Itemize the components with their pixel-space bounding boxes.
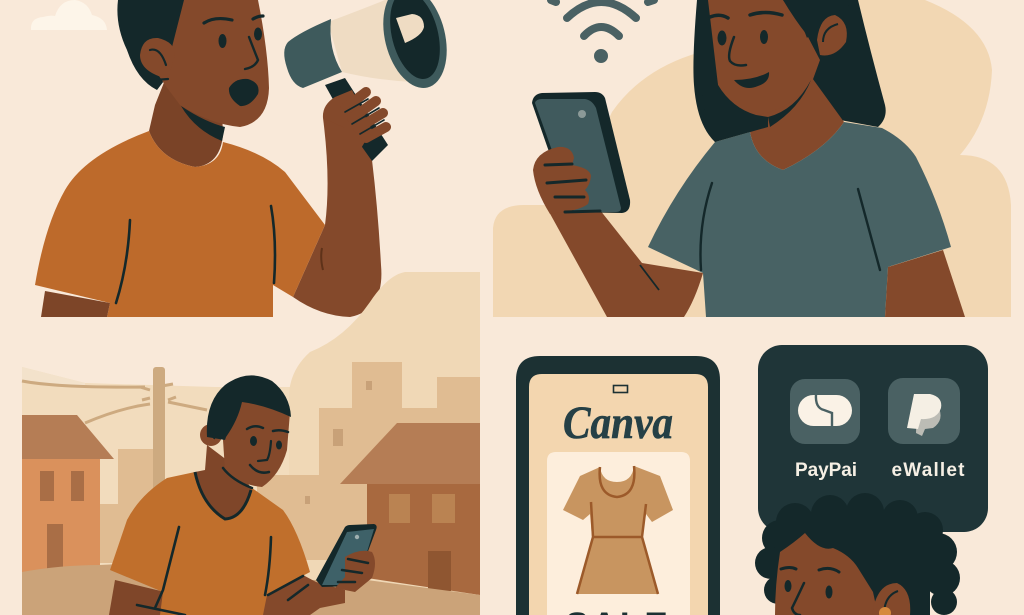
panel: man in town — [22, 272, 480, 615]
man hand — [323, 90, 386, 150]
woman front hair — [702, 30, 768, 142]
phone back — [535, 99, 621, 212]
left house — [22, 415, 114, 574]
man face — [155, 0, 269, 127]
man hair — [207, 375, 291, 440]
woman nose — [792, 583, 804, 615]
left house roof — [22, 415, 114, 459]
man neck — [195, 445, 252, 520]
man shirt — [110, 472, 310, 615]
man open mouth — [229, 79, 259, 106]
megaphone opening — [382, 0, 448, 84]
woman ear — [817, 15, 847, 55]
woman hair — [693, 0, 886, 142]
right house — [340, 423, 480, 595]
man upper arm — [41, 291, 110, 317]
product card — [547, 452, 690, 615]
label: PayPai: PayPai — [795, 460, 857, 481]
man eyebrows — [204, 16, 263, 23]
phone — [316, 524, 377, 587]
man features — [223, 426, 288, 488]
woman curly hair — [755, 493, 960, 615]
phone frame — [516, 356, 720, 615]
icon: PayPai — [790, 379, 860, 444]
woman neck — [750, 75, 844, 170]
distant blob — [289, 272, 480, 600]
megaphone rim — [373, 0, 457, 95]
right buildings — [257, 362, 480, 560]
town backdrop — [22, 367, 480, 615]
woman shirt creases — [700, 183, 880, 270]
background hills — [493, 0, 1011, 317]
icon: notch — [614, 386, 628, 392]
megaphone body — [284, 19, 342, 88]
icon: cloud — [31, 0, 107, 30]
shirt creases — [116, 206, 275, 303]
man face — [222, 400, 290, 487]
utility pole and wires — [22, 367, 207, 517]
label: eWallet: eWallet — [892, 460, 965, 481]
man ear — [140, 38, 175, 79]
icon: dress — [563, 466, 673, 594]
panel: wallet apps — [758, 345, 988, 532]
phone — [532, 92, 630, 213]
woman smile — [734, 72, 769, 88]
icon: eWallet — [888, 378, 960, 444]
megaphone handle — [325, 78, 388, 161]
panel: woman with phone — [493, 0, 1011, 317]
woman eyes — [718, 30, 726, 46]
man arms — [109, 580, 165, 615]
man hair — [117, 0, 185, 90]
man nose — [245, 37, 258, 69]
woman shirt — [648, 122, 951, 317]
sky gap — [22, 272, 480, 387]
left house wall — [22, 459, 100, 574]
phone case — [532, 92, 630, 213]
woman jaw shadow — [768, 80, 811, 127]
woman face — [775, 533, 878, 615]
megaphone — [284, 0, 457, 161]
arm holding megaphone — [293, 100, 381, 317]
right house wall — [367, 484, 480, 595]
man hand — [335, 551, 375, 592]
right house roof — [340, 423, 480, 484]
man shirt — [35, 131, 325, 317]
right house windows — [389, 494, 410, 523]
woman nose — [729, 37, 746, 66]
man creases — [137, 527, 308, 615]
phone camera — [578, 110, 586, 118]
megaphone inner highlight — [396, 14, 424, 43]
woman eyebrows — [710, 12, 782, 18]
panel: curly haired woman — [755, 493, 960, 615]
man ear — [200, 424, 222, 446]
woman eyebrows — [781, 568, 839, 572]
woman face — [708, 0, 820, 115]
man neck — [149, 80, 223, 167]
panel: man with megaphone — [31, 0, 457, 317]
panel: phone shopping screen — [516, 356, 720, 615]
woman fringe — [783, 0, 858, 38]
woman hand — [533, 147, 591, 214]
mid buildings — [100, 449, 153, 563]
woman left arm — [548, 205, 703, 317]
small windows — [129, 381, 372, 504]
man collar — [195, 472, 251, 519]
logo text: Canva — [563, 397, 673, 449]
left house door — [47, 524, 63, 569]
phone screen — [529, 374, 708, 615]
man jaw shadow — [181, 106, 225, 141]
icon: wifi signal — [551, 0, 654, 59]
woman eyes — [784, 580, 792, 592]
man eyes — [218, 34, 226, 48]
woman earring — [879, 607, 891, 615]
woman right arm — [885, 250, 965, 317]
woman ear — [872, 583, 910, 615]
ground — [22, 560, 480, 615]
left house windows — [40, 471, 54, 501]
right house door — [428, 551, 451, 591]
megaphone cone — [328, 0, 412, 82]
wallet card — [758, 345, 988, 532]
